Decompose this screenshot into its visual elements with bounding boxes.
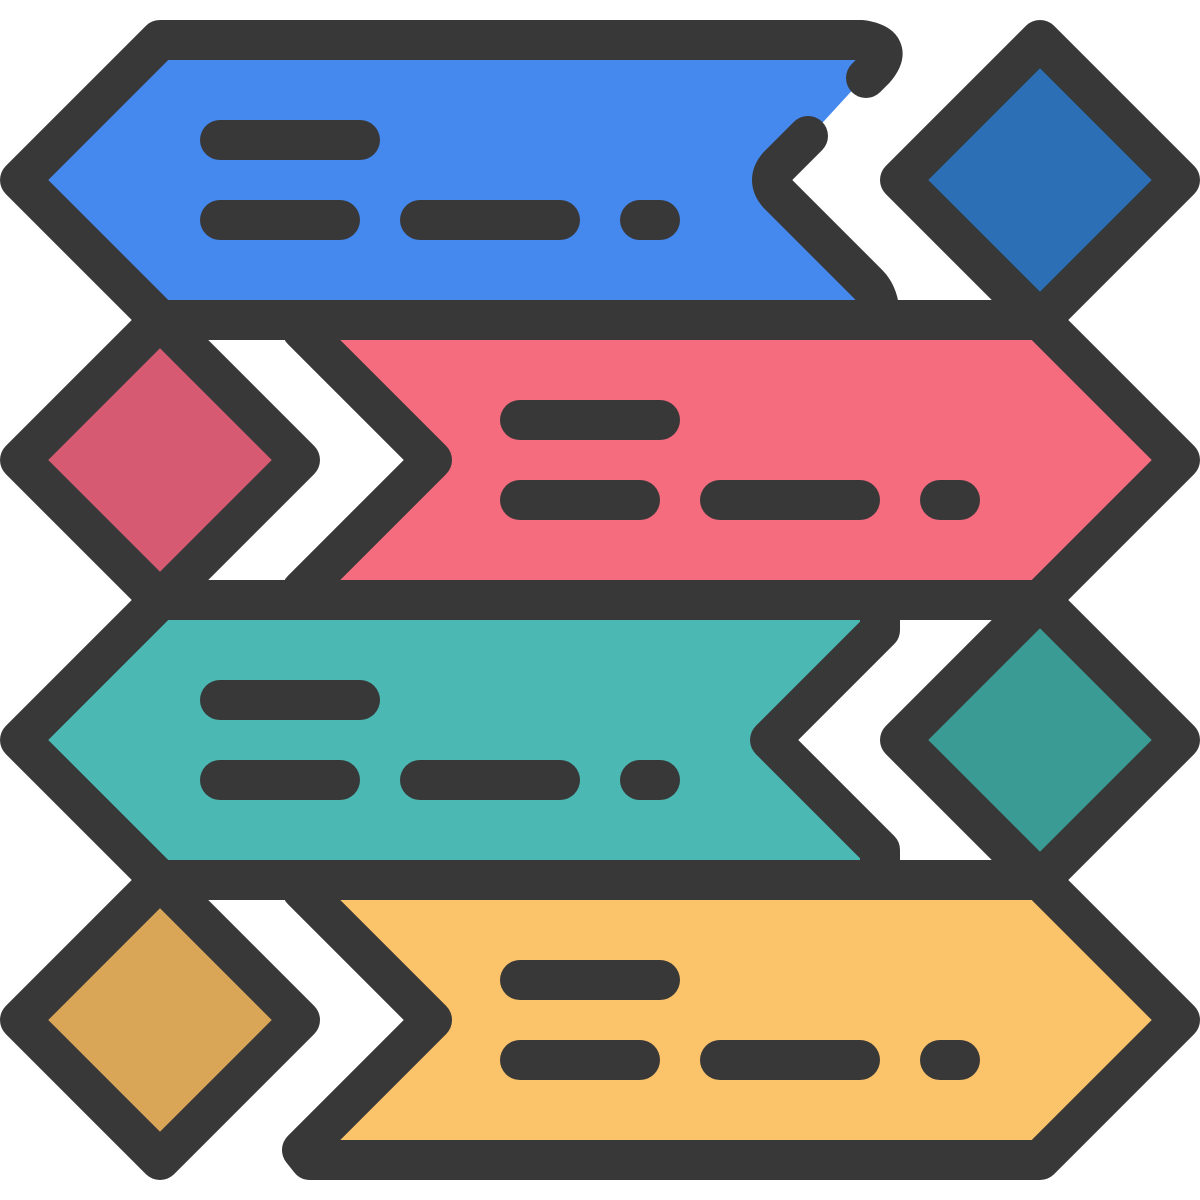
panel: pink banner [302,320,1180,600]
icon: blue diamond [900,40,1180,320]
icon: teal diamond [900,600,1180,880]
icon: pink diamond [20,320,300,600]
icon: orange diamond [20,880,300,1160]
panel: blue banner [20,40,883,320]
panel: orange banner [302,880,1180,1160]
panel: teal banner [20,600,880,880]
